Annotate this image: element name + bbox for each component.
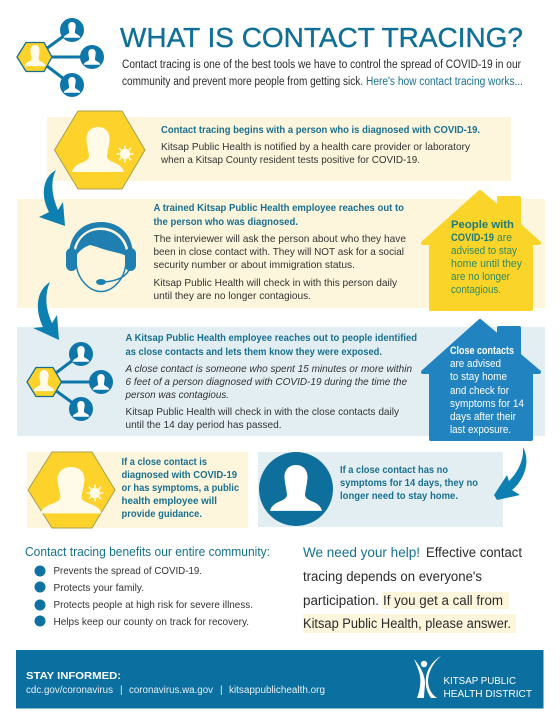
- icon: contact network: [17, 18, 104, 97]
- footer banner: [16, 650, 544, 708]
- step 3 body: Kitsap Public Health will check in with the close contacts daily: [126, 407, 400, 418]
- house: stay home if diagnosed: People with: [451, 219, 514, 231]
- step 3 body: until the 14 day period has passed.: [126, 420, 282, 431]
- house: stay home if diagnosed: advised to stay: [451, 245, 517, 257]
- panel: close contact no symptoms: [258, 452, 503, 527]
- step 1 heading: Contact tracing begins with a person who is diagnosed with COVID-19.: [161, 125, 480, 136]
- house: close contacts advice: last exposure.: [450, 424, 511, 436]
- benefits list: Helps keep our county on track for recovery.: [54, 617, 249, 628]
- house: close contacts advice: and check for: [450, 385, 509, 397]
- symptoms text: If a close contact is: [122, 457, 207, 468]
- icon: yellow hexagon person with virus: [54, 111, 145, 189]
- panel: close contact with symptoms: [27, 452, 248, 528]
- step 2 heading: the person who was diagnosed.: [154, 217, 298, 228]
- house: close contacts advice: are advised: [450, 358, 501, 370]
- symptoms text: [122, 457, 239, 520]
- callout: we need your help: Kitsap Public Health, please answer.: [303, 616, 511, 632]
- logo: Kitsap Public Health District: KITSAP PUBLIC: [444, 675, 516, 687]
- step 3 heading: A Kitsap Public Health employee reaches out to people identified: [126, 333, 417, 344]
- step 2 body: [154, 234, 406, 302]
- house: close contacts advice: to stay home: [450, 371, 507, 383]
- house: close contacts advice: Close contacts: [450, 345, 514, 357]
- intro text: Contact tracing is one of the best tools we have to control the spread of COVID-19 in our: [122, 59, 521, 71]
- symptoms text: or has symptoms, a public: [122, 483, 239, 494]
- step 2 body: until they are no longer contagious.: [154, 291, 311, 302]
- house: stay home if diagnosed: contagious.: [451, 284, 501, 296]
- callout: we need your help: participation.: [303, 593, 379, 609]
- footer links: |: [220, 685, 223, 696]
- panel: step 1 diagnosed person: [47, 111, 511, 189]
- symptoms text: health employee will: [122, 496, 217, 507]
- step 3 definition: A close contact is someone who spent 15 minutes or more within: [125, 364, 412, 375]
- callout: we need your help: We need your help!: [303, 545, 420, 561]
- icon: hexagon person with virus: [28, 452, 115, 528]
- house: stay home if diagnosed: are no longer: [451, 271, 510, 283]
- footer links: cdc.gov/coronavirus: [26, 685, 113, 696]
- footer links: kitsappublichealth.org: [229, 685, 325, 696]
- callout: we need your help: tracing depends on everyone's: [303, 569, 482, 585]
- benefits list: Prevents the spread of COVID-19.: [54, 566, 202, 577]
- no symptoms text: longer need to stay home.: [340, 491, 458, 502]
- step 3 definition: 6 feet of a person diagnosed with COVID-19 during the time the: [126, 377, 407, 388]
- step 2 heading: A trained Kitsap Public Health employee reaches out to: [154, 203, 404, 214]
- arrow: step 2 to step 3: [33, 282, 59, 340]
- footer links: coronavirus.wa.gov: [129, 685, 213, 696]
- symptoms text: diagnosed with COVID-19: [122, 470, 237, 481]
- step 1 body: Kitsap Public Health is notified by a health care provider or laboratory: [161, 142, 471, 153]
- house: stay home if diagnosed: are: [497, 232, 512, 244]
- benefits list: [34, 566, 253, 628]
- callout: we need your help: Effective contact: [426, 545, 522, 561]
- house: close contacts advice: days after their: [450, 411, 516, 423]
- intro text: Here's how contact tracing works...: [366, 76, 523, 88]
- panel: step 3 close contacts: [17, 327, 545, 436]
- step 3 body: [126, 407, 400, 431]
- intro text: community and prevent more people from getting sick.: [122, 76, 363, 88]
- icon: headset agent: [66, 222, 136, 292]
- step 3 heading: as close contacts and lets them know they were exposed.: [126, 347, 382, 358]
- logo: Kitsap Public Health District: HEALTH DISTRICT: [444, 688, 533, 700]
- step 2 body: security number or about immigration status.: [154, 260, 355, 271]
- no symptoms text: If a close contact has no: [340, 465, 448, 476]
- step 2 body: The interviewer will ask the person about who they have: [154, 234, 406, 245]
- benefits heading: Contact tracing benefits our entire community:: [25, 544, 270, 559]
- house: stay home if diagnosed: [423, 192, 539, 309]
- stay informed heading: STAY INFORMED:: [26, 671, 121, 682]
- arrow: step 1 to step 2: [39, 170, 65, 226]
- title: WHAT IS CONTACT TRACING?: [120, 22, 523, 53]
- logo: Kitsap Public Health District: [414, 656, 533, 700]
- step 3 definition: [125, 364, 412, 401]
- benefits list: Protects people at high risk for severe illness.: [54, 600, 253, 611]
- benefits list: Protects your family.: [54, 583, 144, 594]
- icon: circle person: [259, 452, 333, 526]
- no symptoms text: symptoms for 14 days, they no: [340, 478, 478, 489]
- house: stay home if diagnosed: COVID-19: [451, 232, 494, 244]
- step 2 heading: [154, 203, 404, 228]
- footer links: [26, 685, 325, 696]
- step 1 body: when a Kitsap County resident tests positive for COVID-19.: [160, 155, 420, 166]
- panel: step 2 employee reaches out: [17, 199, 545, 308]
- arrow: house to no symptoms panel: [494, 447, 526, 500]
- step 2 body: Kitsap Public Health will check in with this person daily: [154, 278, 398, 289]
- footer links: |: [120, 685, 123, 696]
- intro text: [122, 59, 523, 88]
- symptoms text: provide guidance.: [122, 509, 202, 520]
- house: close contacts advice: [423, 321, 539, 439]
- step 2 body: been in close contact with. They will NOT ask for a social: [154, 247, 404, 258]
- house: stay home if diagnosed: home until they: [451, 258, 522, 270]
- callout: we need your help: [303, 545, 522, 633]
- callout: we need your help: If you get a call from: [383, 593, 503, 609]
- step 3 heading: [126, 333, 417, 358]
- icon: close contacts network: [27, 342, 113, 421]
- house: close contacts advice: symptoms for 14: [450, 398, 524, 410]
- no symptoms text: [340, 465, 478, 502]
- step 1 body: [160, 142, 471, 166]
- step 3 definition: person was contagious.: [125, 390, 229, 401]
